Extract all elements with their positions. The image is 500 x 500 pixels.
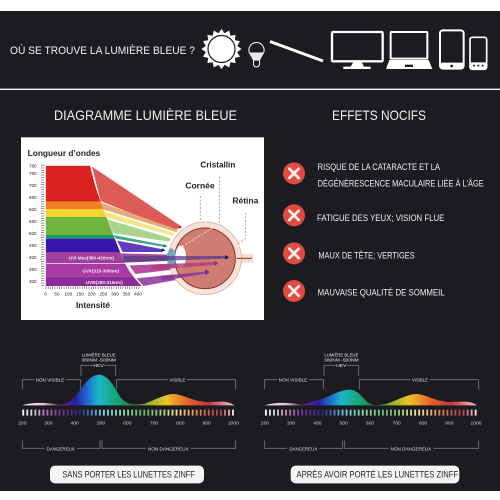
wavelength scale: 400 (71, 420, 79, 426)
blue light label (324, 352, 359, 369)
x axis intensity labels (44, 292, 142, 297)
wavelength scale: 500 (97, 420, 105, 426)
brackets (22, 365, 236, 448)
chart title: wavelength: Longueur d’ondes (28, 149, 101, 158)
wavelength scale (261, 420, 482, 426)
range labels (279, 377, 432, 453)
question heading: OÙ SE TROUVE LA LUMIÈRE BLEUE ? (10, 44, 195, 57)
effect 4: sleep (283, 280, 445, 302)
band labels: UVA(315-380nm) (82, 269, 119, 274)
label: lens: Cristallin (200, 161, 235, 170)
icon: tablet (440, 30, 464, 69)
range labels: NON DANGEREUX (148, 447, 189, 453)
icon: fluorescent tube (270, 42, 323, 61)
range labels: VISIBLE (169, 377, 186, 383)
wavelength scale: 600 (366, 420, 374, 426)
eye cross-section (123, 222, 253, 295)
wavelength scale: 200 (261, 420, 269, 426)
spectrum curve (22, 375, 234, 405)
x axis intensity labels: 50 (54, 292, 60, 297)
wavelength scale: 900 (445, 420, 454, 426)
wavelength bars (265, 404, 478, 422)
x axis intensity labels: 0 (44, 292, 47, 297)
y axis wavelength labels: 750 (29, 171, 37, 176)
panel: spectrum without glasses (18, 352, 239, 483)
x axis intensity labels: 400 (134, 292, 142, 297)
label: cornea: Cornée (185, 181, 215, 190)
light rays entering the eye (92, 167, 227, 286)
effect 2: eye fatigue: FATIGUE DES YEUX; VISION FLUE (317, 213, 444, 223)
range labels: DANGEREUX (289, 447, 318, 453)
blue light label: 380NM -500NM (81, 358, 116, 364)
wavelength scale: 300 (44, 420, 53, 426)
heading: harmful effects: EFFETS NOCIFS (332, 107, 426, 123)
y axis wavelength labels (29, 164, 37, 284)
icon: light bulb (249, 42, 264, 67)
y axis wavelength labels: 650 (29, 195, 37, 200)
effect 2: eye fatigue (283, 204, 444, 226)
blue light label: 380NM -500NM (324, 358, 359, 364)
x axis intensity labels: 350 (122, 292, 131, 297)
pill: without glasses: SANS PORTER LES LUNETTES ZINFF (62, 469, 195, 479)
effect 3: headaches: MAUX DE TÊTE; VERTIGES (318, 250, 415, 260)
wavelength scale: 800 (176, 420, 185, 426)
y axis wavelength labels: 600 (29, 207, 37, 212)
range labels: NON VISIBLE (36, 377, 65, 383)
icon: laptop (386, 32, 432, 69)
x axis intensity labels: 150 (76, 292, 84, 297)
icon: smartphone (470, 37, 487, 69)
x axis ticks (46, 284, 141, 292)
label: retina: Rétina (232, 197, 259, 206)
x axis intensity labels: 300 (111, 292, 119, 297)
y axis wavelength labels: 400 (29, 255, 37, 260)
blue light label (81, 352, 116, 369)
panel: wavelength and eye chart (21, 137, 264, 320)
y axis wavelength labels: 550 (29, 219, 37, 224)
blue light label: LUMIÈRE BLEUE (82, 352, 116, 359)
y axis wavelength labels: 300 (29, 279, 37, 284)
y axis wavelength labels: 700 (29, 183, 37, 188)
range labels (36, 377, 189, 453)
pill: with glasses: APRÈS AVOIR PORTÉ LES LUNETTES ZINFF (296, 469, 459, 479)
wavelength scale: 200 (18, 420, 27, 426)
wavelength scale: 400 (313, 420, 322, 426)
range labels: VISIBLE (412, 377, 429, 383)
leader lines (182, 177, 246, 247)
icon: desktop monitor (332, 32, 383, 69)
y axis wavelength labels: 350 (29, 267, 37, 272)
x axis intensity labels: 200 (88, 292, 96, 297)
range labels: NON DANGEREUX (391, 447, 432, 453)
section: where blue light is found (10, 29, 487, 69)
axis title: intensity: Intensité (76, 301, 111, 310)
wavelength scale: 900 (203, 420, 211, 426)
y axis ticks (38, 165, 48, 286)
wavelength scale: 1000 (228, 420, 239, 426)
effect 3: headaches (283, 242, 415, 264)
band labels: UVB(280-315nm) (86, 280, 123, 285)
wavelength scale: 1000 (470, 420, 482, 426)
pill: without glasses (50, 466, 204, 483)
x axis intensity labels: 100 (64, 292, 73, 297)
wavelength scale (18, 420, 239, 426)
range labels: DANGEREUX (47, 447, 75, 453)
range labels: NON VISIBLE (279, 377, 308, 383)
spectrum bands (46, 166, 146, 286)
x axis intensity labels: 250 (99, 292, 108, 297)
heading: diagram: DIAGRAMME LUMIÈRE BLEUE (54, 107, 237, 123)
y axis wavelength labels: 450 (29, 243, 37, 248)
wavelength scale: 600 (123, 420, 132, 426)
wavelength bars (22, 404, 235, 422)
effect 1: cataract (283, 162, 484, 189)
icon: sun (202, 29, 242, 69)
band labels: UVI Max(380-420nm) (69, 256, 114, 261)
y axis wavelength labels: 500 (29, 231, 37, 236)
wavelength scale: 800 (419, 420, 427, 426)
reduced spectrum curve (265, 390, 478, 413)
effect 4: sleep: MAUVAISE QUALITÉ DE SOMMEIL (318, 288, 445, 298)
blue light label: LUMIÈRE BLEUE (324, 352, 359, 359)
panel: harmful effects list (283, 162, 484, 302)
blue light label: HEV (336, 363, 347, 369)
panel: spectrum with glasses (261, 352, 482, 483)
wavelength scale: 700 (393, 420, 401, 426)
effect 1: cataract: RISQUE DE LA CATARACTE ET LA (318, 162, 440, 172)
wavelength scale: 700 (150, 420, 158, 426)
pill: with glasses (291, 466, 459, 483)
blue light label: HEV (94, 363, 104, 369)
y axis wavelength labels: 780 (29, 164, 37, 169)
wavelength scale: 500 (340, 420, 348, 426)
wavelength scale: 300 (287, 420, 295, 426)
brackets (265, 365, 479, 448)
band labels (69, 256, 123, 285)
